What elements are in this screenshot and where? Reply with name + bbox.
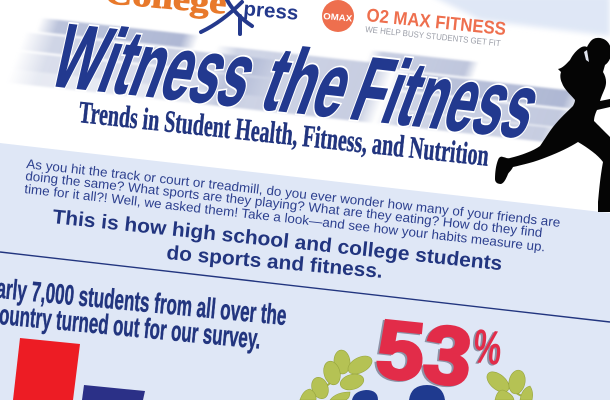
divider bbox=[0, 252, 610, 322]
lead heading: This is how high school and college students bbox=[51, 206, 503, 275]
title: the bbox=[251, 28, 367, 136]
logo: CollegeXpress bbox=[103, 0, 299, 34]
icon: athlete figures bbox=[352, 385, 445, 400]
title: Witness bbox=[40, 5, 270, 125]
icon: blue X bbox=[201, 0, 252, 34]
title streaks bbox=[7, 13, 594, 145]
intro paragraph: time for it all?! Well, we asked them! Take a look—and see how your habits measure up. bbox=[24, 181, 546, 254]
title bbox=[40, 5, 554, 157]
title: Witness bbox=[40, 5, 270, 125]
blue top-right strip bbox=[430, 0, 610, 36]
title: the bbox=[251, 28, 367, 136]
tagline: WE HELP BUSY STUDENTS GET FIT bbox=[365, 24, 502, 48]
intro paragraph: doing the same? What sports are they playing? What are they eating? How do they find bbox=[25, 168, 543, 240]
statistic: 53%: % bbox=[471, 320, 504, 376]
intro paragraph: As you hit the track or court or treadmill, do you ever wonder how many of your friends are bbox=[26, 156, 561, 230]
logo: O2 Max Fitness bbox=[322, 0, 507, 48]
laurel: right bbox=[483, 368, 533, 400]
icon: orange circle bbox=[322, 0, 354, 32]
lead heading: do sports and fitness. bbox=[166, 242, 384, 283]
icon: runner silhouette bbox=[495, 38, 610, 212]
brand name: O2 MAX FITNESS bbox=[366, 4, 507, 39]
laurel: left bbox=[300, 349, 375, 400]
survey heading: country turned out for our survey. bbox=[0, 298, 262, 355]
bar: blue bbox=[82, 385, 145, 400]
bar: red bbox=[13, 338, 80, 400]
bar chart bbox=[13, 338, 145, 400]
icon: orange circle: OMAX bbox=[323, 11, 353, 24]
survey heading bbox=[0, 271, 288, 355]
white header band bbox=[0, 0, 610, 213]
